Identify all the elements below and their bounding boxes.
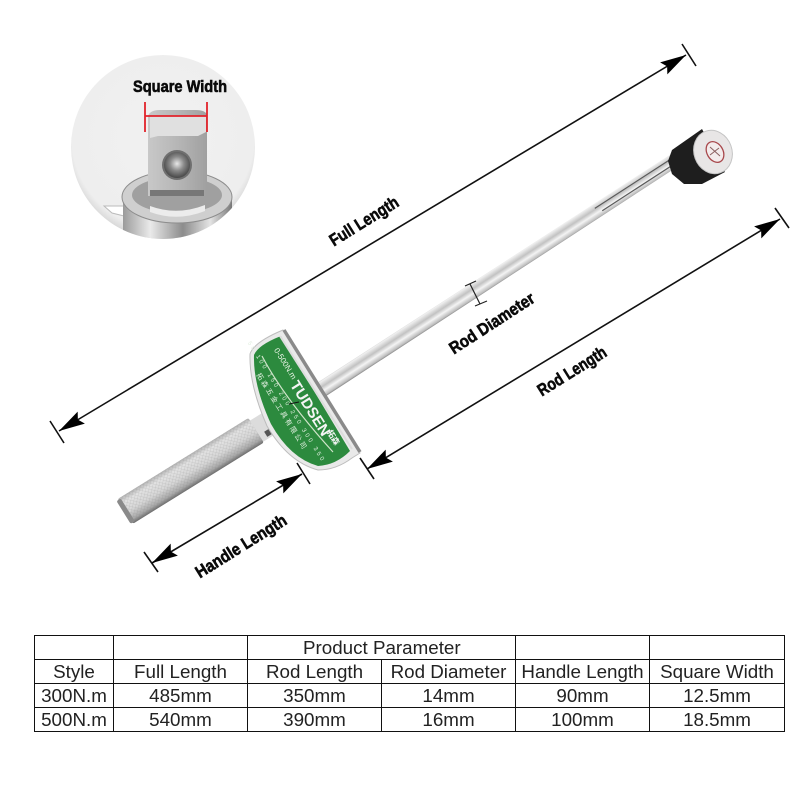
product parameter table: Product Parameter (303, 637, 461, 658)
inset: square width detail (71, 55, 255, 250)
product parameter table: Rod Diameter (391, 661, 506, 682)
knurled grip (118, 418, 264, 524)
label: rod length: Rod Length (534, 343, 610, 400)
product parameter table: 100mm (551, 709, 614, 730)
torque wrench (116, 125, 738, 525)
scale plate: 拓森 (325, 428, 342, 447)
product parameter table: 12.5mm (683, 685, 751, 706)
inset disc background (71, 55, 255, 239)
rod (268, 148, 686, 429)
arrow: rod length (360, 208, 789, 479)
scale plate: 50 100 150 200 250 300 350 (246, 341, 326, 464)
product parameter table: Handle Length (521, 661, 644, 682)
label: square width: Square Width (133, 77, 227, 96)
product parameter table: Full Length (134, 661, 227, 682)
product parameter table: 500N.m (41, 709, 107, 730)
product parameter table: 300N.m (41, 685, 107, 706)
product parameter table: Rod Length (266, 661, 363, 682)
product parameter table: 90mm (556, 685, 609, 706)
wrench head (668, 125, 738, 184)
product parameter table: 14mm (422, 685, 475, 706)
product parameter table: 350mm (283, 685, 346, 706)
plate text: 0-500N.m (272, 346, 298, 381)
socket square drive (104, 110, 232, 250)
label: rod diameter: Rod Diameter (446, 289, 539, 358)
product parameter table: 18.5mm (683, 709, 751, 730)
product parameter table: 485mm (149, 685, 212, 706)
scale plate (246, 330, 360, 470)
scale plate: TUDSEN (286, 378, 333, 439)
product parameter table (34, 635, 785, 732)
product parameter table: Square Width (660, 661, 774, 682)
product parameter table: Style (53, 661, 95, 682)
product parameter table: 540mm (149, 709, 212, 730)
product parameter table: 16mm (422, 709, 475, 730)
product parameter table: 390mm (283, 709, 346, 730)
label: handle length: Handle Length (192, 511, 290, 582)
scale plate: 拓森五金工具有限公司 (254, 371, 310, 452)
handle neck (248, 407, 285, 443)
red width marker (145, 102, 207, 132)
label: full length: Full Length (326, 193, 402, 250)
rod diameter marker (446, 281, 539, 358)
arrow: full length (50, 44, 696, 443)
arrow: handle length (144, 463, 310, 582)
handle (116, 401, 291, 525)
